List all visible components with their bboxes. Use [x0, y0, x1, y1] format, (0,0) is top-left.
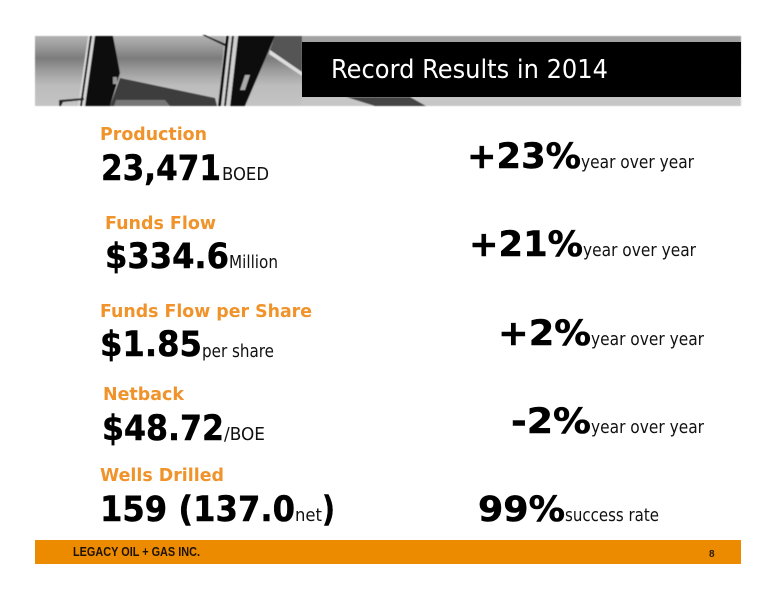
title: Record Results in 2014 — [331, 55, 608, 85]
metric: funds flow: $334.6 — [105, 237, 229, 277]
change: funds flow per share — [498, 314, 705, 354]
change: production: year over year — [581, 153, 695, 173]
change: funds flow — [469, 225, 697, 265]
change: funds flow per share: year over year — [591, 330, 705, 350]
metric: funds flow per share: $1.85 — [100, 325, 202, 365]
metric: production: Production — [100, 124, 207, 145]
metric: funds flow: Million — [229, 253, 278, 273]
change: netback — [511, 402, 705, 442]
change: funds flow: year over year — [583, 241, 697, 261]
metric: production: 23,471 — [101, 149, 221, 189]
change: funds flow: +21% — [469, 225, 583, 265]
title bar — [302, 42, 741, 97]
change: production — [467, 137, 695, 177]
change: funds flow per share: +2% — [498, 314, 591, 354]
page number: 8 — [709, 549, 715, 560]
metric: production — [100, 124, 269, 189]
metric: wells drilled — [100, 465, 335, 530]
metric: funds flow — [105, 213, 278, 277]
success rate: success rate — [565, 506, 659, 526]
metric: production: BOED — [222, 165, 269, 185]
metric: netback: /BOE — [224, 425, 265, 445]
success rate: 99% — [478, 490, 565, 530]
metric: netback — [102, 384, 265, 449]
metric: wells drilled: Wells Drilled — [100, 465, 224, 486]
footer bar — [35, 540, 741, 564]
change: netback: year over year — [591, 418, 705, 438]
metric: funds flow: Funds Flow — [105, 213, 216, 234]
metric: funds flow per share: Funds Flow per Share — [100, 301, 312, 322]
metric: funds flow per share — [100, 301, 312, 365]
success rate — [478, 490, 659, 530]
company name: LEGACY OIL + GAS INC. — [73, 545, 200, 559]
metric: wells drilled: ) — [322, 490, 335, 530]
change: netback: -2% — [511, 402, 591, 442]
metric: netback: Netback — [103, 384, 185, 405]
banner photo: pumpjacks — [35, 35, 741, 106]
change: production: +23% — [467, 137, 581, 177]
metric: funds flow per share: per share — [202, 342, 274, 362]
metric: wells drilled: net — [295, 506, 322, 526]
metric: netback: $48.72 — [102, 409, 224, 449]
metric: wells drilled: 159 (137.0 — [100, 490, 295, 530]
